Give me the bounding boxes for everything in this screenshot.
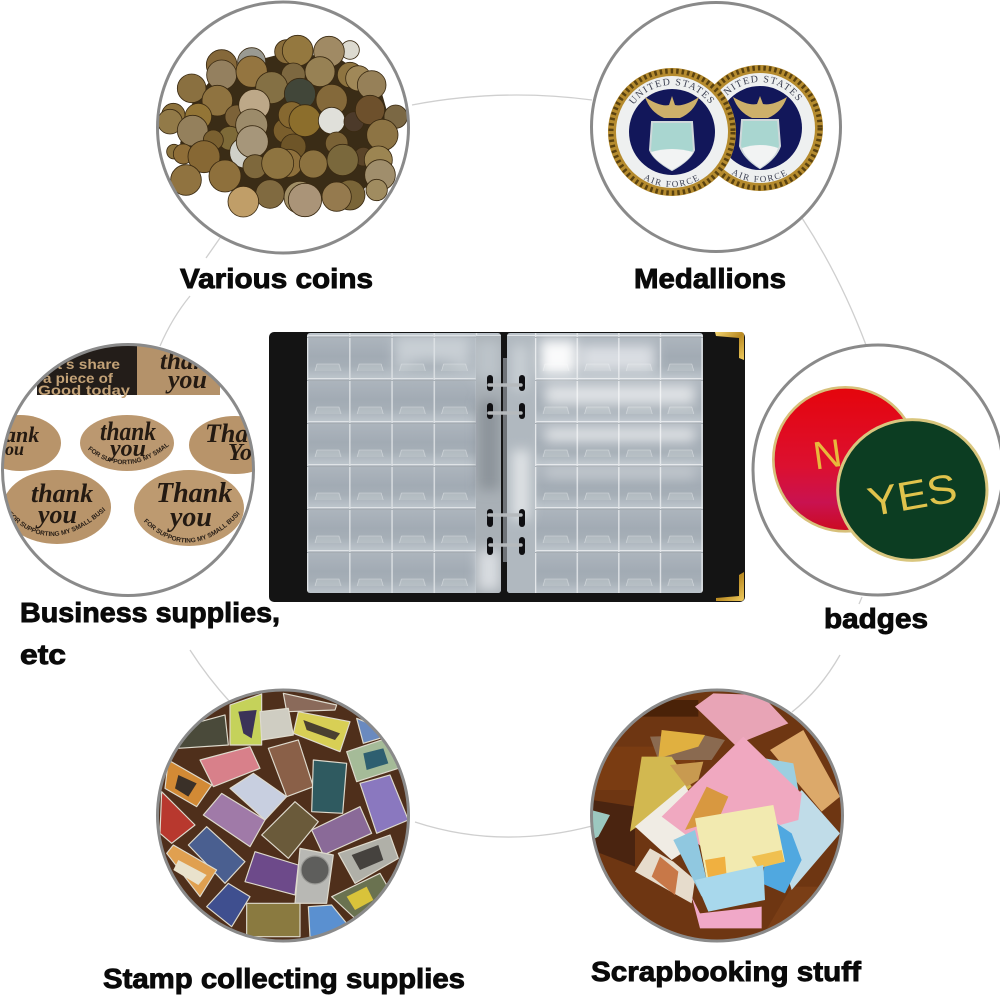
icon: right medallion: UNITED STATES	[723, 76, 802, 100]
binder rings and spine	[487, 358, 525, 562]
icon: left medallion: UNITED STATES	[628, 78, 714, 104]
label: business supplies: Business supplies,	[20, 597, 280, 628]
thank-you sticker photo: FOR SUPPORTING MY SMALL BUSINESS	[88, 444, 170, 464]
label: various coins: Various coins	[180, 263, 373, 294]
thank-you sticker photo: Thank	[156, 478, 232, 509]
thank-you sticker photo: thank	[160, 348, 220, 375]
panel: various coins	[158, 2, 408, 253]
icon: red NO badge	[773, 387, 917, 531]
card text: a piece of	[43, 370, 113, 386]
thank-you sticker photo	[4, 346, 252, 546]
sticker: bottom left	[3, 470, 111, 544]
thank-you sticker photo: thank	[31, 479, 93, 508]
label: stamp collecting: Stamp collecting supplies	[103, 963, 465, 994]
sticker: top right	[189, 416, 252, 474]
icon: green YES badge	[838, 420, 987, 560]
card text: t's share	[57, 356, 120, 372]
label: badges: badges	[824, 603, 928, 634]
thank-you sticker photo: thank	[100, 417, 156, 446]
thank-you sticker photo: you	[165, 365, 207, 394]
scrapbook paper photo	[590, 688, 845, 944]
label: medallions: Medallions	[634, 263, 786, 294]
card text	[38, 356, 130, 398]
panel: scrapbooking	[590, 688, 845, 944]
icon: left medallion: AIR FORCE	[643, 174, 699, 187]
label: scrapbooking: Scrapbooking stuff	[591, 956, 862, 987]
sticker: top centre	[80, 415, 174, 471]
thank-you sticker photo: you	[35, 500, 77, 529]
gold corner bottom	[716, 572, 744, 601]
label: business supplies: etc	[20, 639, 66, 670]
circle outline	[158, 2, 408, 253]
thank-you sticker photo: you	[167, 502, 212, 533]
right page pockets	[507, 333, 703, 593]
panel: coin album binder	[269, 332, 745, 602]
panel: badges	[753, 345, 1000, 595]
panel: business supplies	[1, 343, 255, 597]
thank-you sticker photo: Yo	[228, 440, 252, 466]
circle outline	[592, 690, 842, 941]
card text: Good today	[38, 382, 130, 398]
thank-you sticker photo: ank	[5, 422, 39, 447]
icon: green YES badge: YES	[864, 464, 961, 525]
thank-you sticker photo: ou	[5, 439, 24, 459]
icon: red NO badge: N	[810, 431, 845, 479]
coin pile photo	[158, 35, 407, 217]
panel: stamps	[155, 688, 415, 944]
circle outline	[592, 2, 840, 252]
thank-you sticker photo: you	[107, 436, 146, 462]
left page pockets	[307, 333, 501, 593]
kraft card	[137, 344, 220, 395]
circle outline	[2, 344, 254, 596]
connecting ring arcs	[160, 95, 866, 837]
stamp collage photo	[155, 688, 415, 944]
sticker: top left	[0, 415, 61, 471]
circle outline	[158, 690, 408, 941]
black card	[37, 344, 137, 395]
icon: left medallion	[608, 68, 736, 196]
binder cover	[269, 332, 745, 602]
gold corner top	[715, 332, 744, 360]
thank-you sticker photo: Than	[205, 419, 263, 448]
label: business supplies	[20, 597, 280, 670]
thank-you sticker photo: FOR SUPPORTING MY SMALL BUSINESS	[144, 511, 240, 543]
sticker: bottom right	[134, 470, 244, 546]
circle outline	[753, 345, 1000, 595]
icon: right medallion	[714, 65, 823, 191]
panel: medallions	[590, 1, 842, 253]
icon: right medallion: AIR FORCE	[731, 170, 787, 182]
